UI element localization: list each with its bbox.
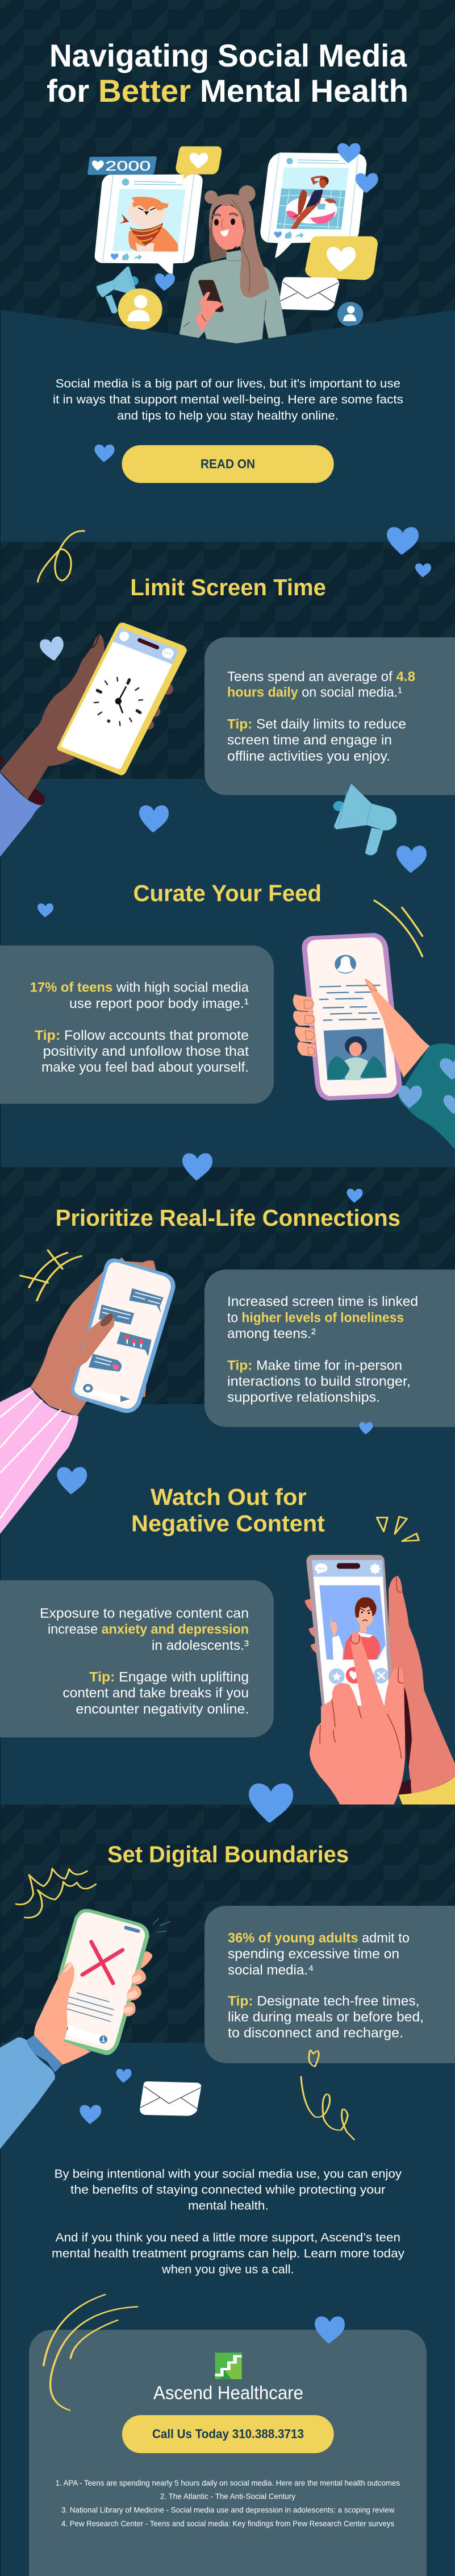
panel: boundaries card: like during meals or before bed,	[228, 2009, 424, 2025]
button: read on: READ ON	[201, 457, 255, 471]
heading: watch out for negative content	[131, 1484, 325, 1537]
icon: light heart	[39, 636, 66, 663]
icon: large heart at boundary	[249, 1783, 293, 1823]
panel: connections card: to higher levels of loneliness	[227, 1310, 404, 1325]
illustration: pink sleeve	[0, 1387, 78, 1534]
icon: likes counter 2000: 2000	[105, 159, 151, 174]
panel: negative content card	[0, 1581, 274, 1737]
icon: small heart left	[37, 903, 53, 917]
title: for Better Mental Health	[47, 73, 408, 109]
icon: large heart	[387, 527, 419, 554]
title: Navigating Social Media	[49, 38, 407, 73]
illustration: nail	[98, 1312, 115, 1328]
icon: envelope	[279, 277, 339, 310]
panel: boundaries card	[204, 1906, 455, 2063]
panel: connections card	[204, 1270, 455, 1427]
closing text: By being intentional with your social media use, you can enjoy	[55, 2167, 402, 2181]
icon: yellow wave scribble	[16, 1869, 96, 1918]
illustration: green phone	[58, 1909, 149, 2055]
icon: megaphone	[97, 267, 139, 313]
intro text: and tips to help you stay healthy online.	[117, 409, 339, 422]
panel: negative content card: increase anxiety and depression	[48, 1622, 249, 1637]
illustration: purple phone	[302, 933, 402, 1101]
background: boundaries patterned band	[0, 1805, 455, 2043]
illustration: sleeve with hearts	[398, 1043, 455, 1150]
closing text: mental health treatment programs can help. Learn more today	[52, 2247, 404, 2260]
illustration: front hand	[310, 1577, 405, 1805]
closing text: mental health.	[188, 2199, 269, 2213]
background: connections patterned band	[0, 1167, 455, 1404]
panel: screen time card: Teens spend an average of 4.8	[227, 669, 415, 685]
hero illustration: girl with phone and social posts	[87, 143, 378, 345]
illustration: hand holding phone with feed	[293, 933, 455, 1150]
button: call us today	[122, 2415, 334, 2453]
icon: yellow swirl	[37, 531, 84, 582]
heading: set digital boundaries: Set Digital Boundaries	[107, 1841, 349, 1867]
panel: boundaries card: spending excessive time on	[228, 1947, 399, 1962]
panel: screen time card: offline activities you enjoy.	[227, 749, 390, 764]
icon: heart	[139, 806, 169, 832]
icon: left post with dog photo	[95, 175, 203, 275]
panel: boundaries card: social media.⁴	[228, 1963, 314, 1978]
panel: boundaries card: to disconnect and recharge.	[228, 2025, 403, 2040]
icon: heart on card	[315, 2317, 345, 2343]
icon: likes counter 2000	[87, 156, 157, 175]
panel: footer card	[29, 2330, 427, 2576]
heading: watch out for negative content: Watch Out for	[151, 1484, 307, 1510]
button: call us today: Call Us Today 310.388.3713	[152, 2427, 304, 2441]
icon: heart below megaphone	[396, 846, 427, 873]
panel: negative content card: in adolescents.³	[152, 1638, 249, 1653]
panel: screen time card: Tip: Set daily limits to reduce	[227, 717, 406, 732]
icon: small heart under card	[359, 1422, 373, 1434]
panel: boundaries card: Tip: Designate tech-free times,	[228, 1993, 419, 2009]
left edge strip	[0, 310, 1, 2576]
panel: curate card: 17% of teens with high social media	[30, 980, 249, 995]
logo: ascend healthcare: Ascend Healthcare	[153, 2382, 303, 2403]
closing text: And if you think you need a little more support, Ascend’s teen	[56, 2231, 400, 2245]
closing text: the benefits of staying connected while protecting your	[70, 2183, 386, 2197]
logo: ascend healthcare	[153, 2353, 303, 2403]
closing text	[52, 2167, 404, 2276]
illustration: back hand	[305, 1576, 455, 1795]
panel: screen time card: screen time and engage in	[227, 733, 392, 748]
panel: connections card: among teens.²	[227, 1326, 316, 1342]
panel: curate card: make you feel bad about yourself.	[41, 1060, 249, 1075]
illustration: hand holding phone with clock	[0, 623, 187, 857]
illustration: clock face	[94, 678, 143, 725]
icon: right post with pool photo	[260, 152, 366, 258]
illustration: hand texting on blue phone	[0, 1250, 176, 1534]
panel: connections card: Tip: Make time for in-person	[227, 1358, 402, 1373]
icon: yellow heart bubble top	[176, 146, 222, 179]
icon: heart	[80, 2105, 101, 2124]
intro text: it in ways that support mental well-being. Here are some facts	[53, 393, 403, 406]
illustration: sleeve	[0, 2035, 62, 2149]
button: read on	[122, 445, 334, 483]
panel: boundaries card: 36% of young adults admit to	[228, 1931, 410, 1946]
references: 2. The Atlantic - The Anti-Social Century	[160, 2492, 295, 2501]
illustration: thumb	[73, 1313, 114, 1371]
icon: yellow heart swirl	[301, 2050, 354, 2139]
icon: heart at boundary	[182, 1154, 212, 1180]
heading: prioritize real-life connections: Prioritize Real-Life Connections	[56, 1205, 400, 1231]
icon: small heart	[116, 2069, 132, 2083]
icon: yellow hash scribble	[20, 1250, 81, 1300]
background: header patterned band	[0, 0, 455, 352]
references: 4. Pew Research Center - Teens and social media: Key findings from Pew Research Center surveys	[61, 2519, 394, 2528]
heading: limit screen time: Limit Screen Time	[130, 574, 326, 600]
panel: curate card	[0, 945, 274, 1104]
icon: blue heart under left post	[155, 273, 175, 291]
background: screen time patterned band	[0, 542, 455, 779]
intro text	[53, 377, 403, 422]
panel: screen time card	[204, 637, 455, 795]
icon: signal ticks	[153, 1918, 170, 1932]
icon: small blue avatar	[337, 302, 363, 326]
icon: yellow avatar	[118, 288, 162, 330]
icon: yellow lines	[374, 901, 423, 956]
illustration: hand holding phone with red X	[0, 1909, 170, 2149]
panel: connections card: Increased screen time is linked	[227, 1294, 418, 1309]
icon: envelope	[140, 2081, 201, 2116]
panel: connections card: interactions to build stronger,	[227, 1374, 411, 1389]
panel: curate card: Tip: Follow accounts that promote	[35, 1028, 249, 1043]
illustration: hand	[31, 1258, 156, 1416]
intro text: Social media is a big part of our lives, but it's important to use	[56, 377, 400, 391]
panel: negative content card: Tip: Engage with uplifting	[89, 1670, 249, 1685]
illustration: hand	[293, 978, 429, 1078]
icon: yellow triangles	[377, 1517, 419, 1541]
closing text: when you give us a call.	[161, 2263, 294, 2276]
heading: watch out for negative content: Negative Content	[131, 1511, 325, 1537]
icon: yellow arcs	[44, 2295, 137, 2410]
illustration: hand	[34, 1962, 146, 2065]
icon: yellow heart bubble right	[305, 237, 378, 280]
panel: negative content card: encounter negativity online.	[76, 1702, 249, 1717]
illustration: hands tapping phone	[305, 1555, 455, 1805]
title	[47, 38, 408, 109]
panel: negative content card: Exposure to negative content can	[40, 1606, 249, 1621]
references	[56, 2478, 400, 2528]
heading: curate your feed: Curate Your Feed	[133, 880, 322, 906]
illustration: hand	[0, 634, 173, 806]
icon: megaphone right	[333, 783, 396, 855]
panel: connections card: supportive relationships.	[227, 1390, 380, 1405]
illustration: yellow phone	[57, 623, 187, 775]
illustration: phone frame and screen	[306, 1555, 394, 1706]
panel: curate card: positivity and unfollow those that	[43, 1044, 249, 1059]
icon: blue hearts around right post	[337, 143, 378, 193]
references: 1. APA - Teens are spending nearly 5 hours daily on social media. Here are the mental health outcomes	[56, 2478, 400, 2487]
icon: small heart near heading	[347, 1189, 362, 1202]
panel: curate card: use report poor body image.¹	[69, 996, 249, 1011]
illustration: fingers behind phone	[138, 1951, 152, 1969]
illustration: dark shadow and yellow cuff	[399, 1685, 455, 1805]
icon: small heart	[415, 563, 431, 577]
intro section blue chevron background	[0, 310, 455, 542]
icon: heart near sleeve	[57, 1467, 87, 1494]
panel: negative content card: content and take breaks if you	[62, 1686, 249, 1701]
illustration: girl	[180, 185, 286, 345]
illustration: sleeve	[0, 772, 42, 857]
icon: heart beside button	[94, 445, 115, 462]
panel: screen time card: hours daily on social media.¹	[227, 685, 402, 700]
illustration: blue phone	[71, 1259, 176, 1413]
references: 3. National Library of Medicine - Social media use and depression in adolescents: a scoping review	[61, 2506, 395, 2515]
